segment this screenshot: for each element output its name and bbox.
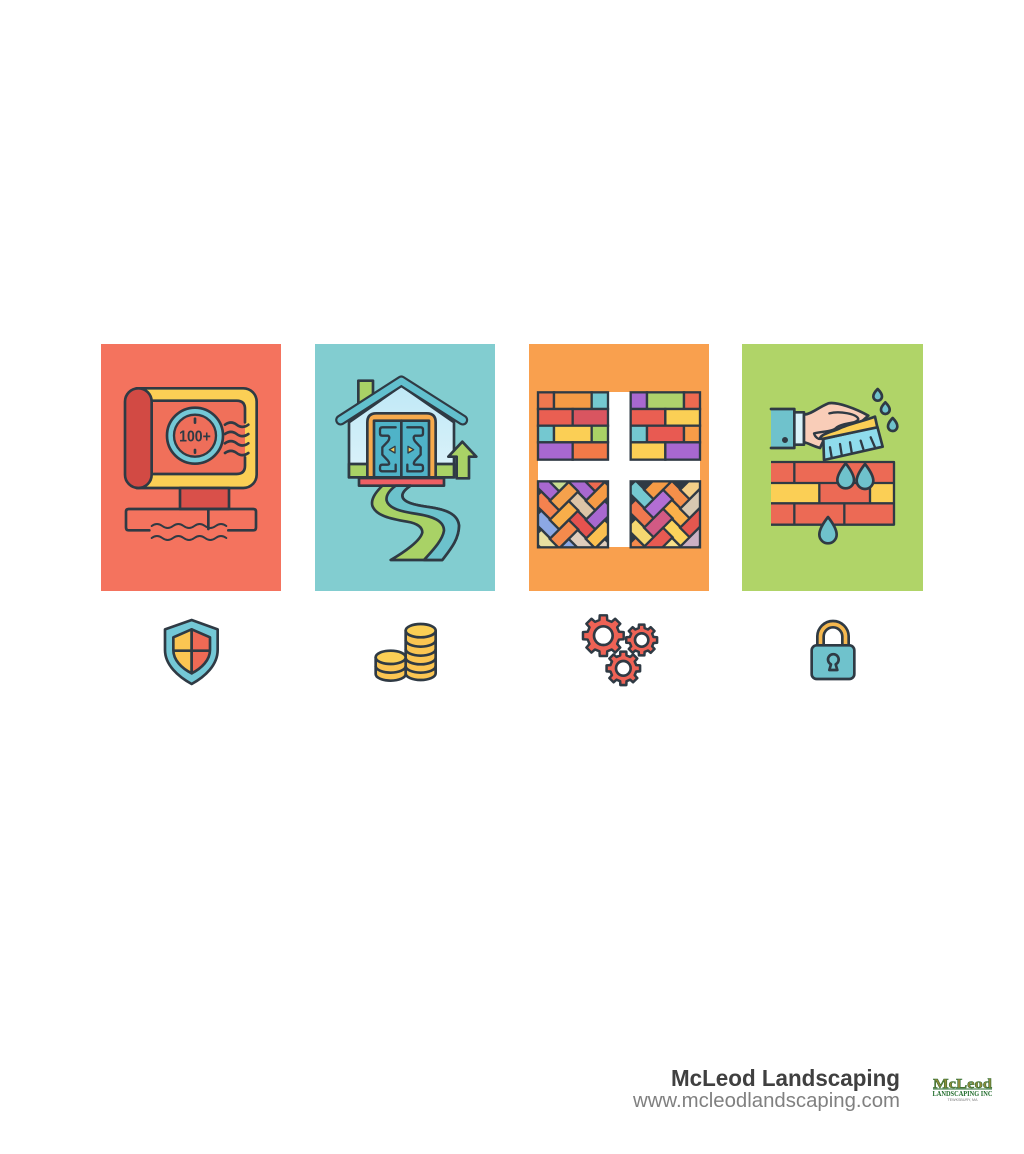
icon: gears bbox=[583, 615, 657, 685]
panel: curb appeal and home value bbox=[315, 344, 495, 591]
icon: house with ornate door, path and value arrow bbox=[341, 381, 476, 560]
icon: shield bbox=[165, 620, 218, 684]
brick pattern: herringbone left bbox=[536, 480, 610, 548]
white cross gap bbox=[538, 392, 700, 547]
panel: easy maintenance bbox=[742, 344, 923, 591]
icon: hand scrubbing brick wall with water drops bbox=[771, 389, 897, 543]
footer brand text bbox=[632, 1065, 900, 1112]
panel: heritage durability bbox=[101, 344, 281, 591]
brick pattern: running bond right bbox=[631, 392, 700, 460]
panel: design versatility bbox=[529, 344, 709, 591]
icon: coin stacks bbox=[376, 624, 436, 681]
footer brand text: www.mcleodlandscaping.com bbox=[632, 1090, 900, 1112]
logo: McLeod Landscaping Inc: TEWKSBURY, MA bbox=[948, 1098, 978, 1102]
brick pattern: herringbone right bbox=[630, 480, 702, 548]
logo: McLeod Landscaping Inc: LANDSCAPING INC bbox=[932, 1090, 992, 1098]
brick pattern: running bond left bbox=[538, 392, 608, 460]
logo: McLeod Landscaping Inc bbox=[932, 1077, 992, 1102]
icon: paver scroll with 100+ year dial bbox=[125, 388, 257, 540]
footer brand text: McLeod Landscaping bbox=[671, 1065, 900, 1091]
icon: paver scroll with 100+ year dial: 100+ bbox=[179, 428, 211, 445]
logo: McLeod Landscaping Inc: McLeod bbox=[933, 1077, 992, 1092]
icon: padlock bbox=[812, 621, 854, 679]
